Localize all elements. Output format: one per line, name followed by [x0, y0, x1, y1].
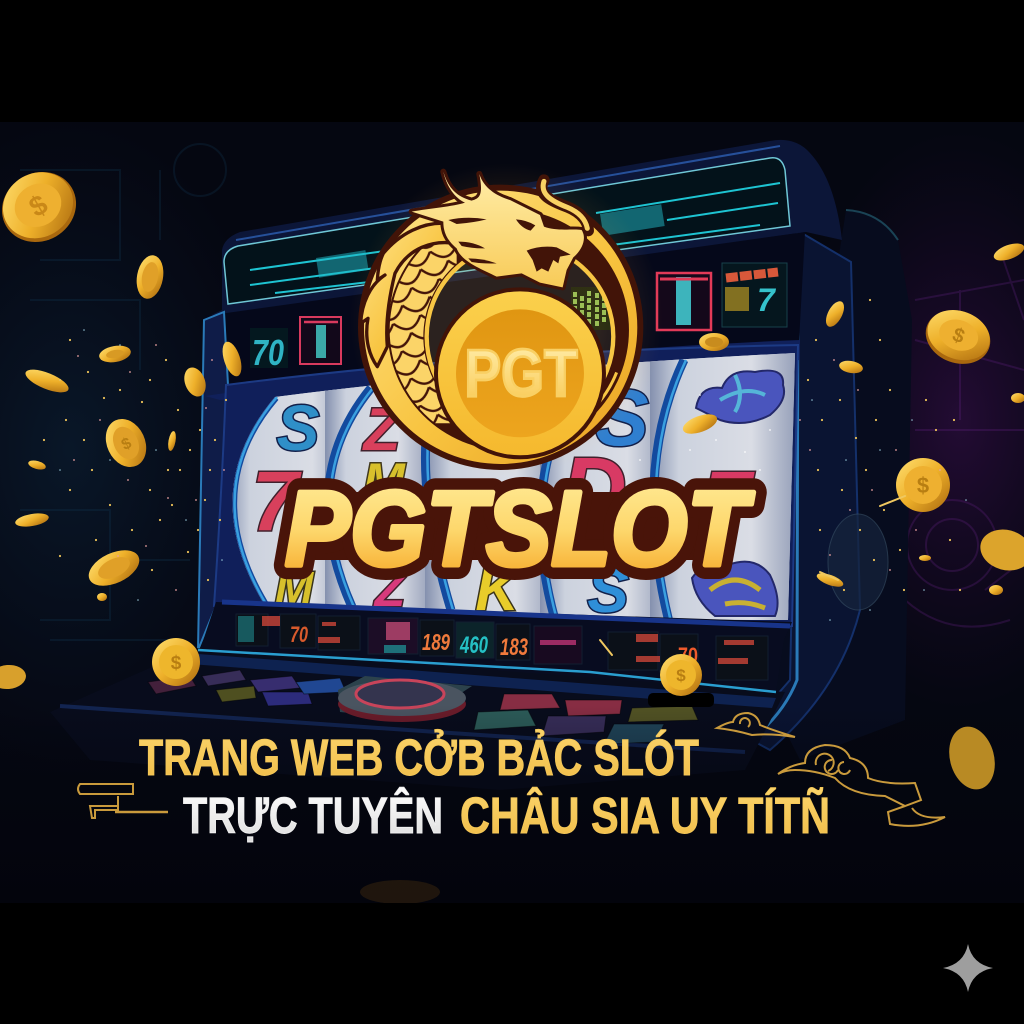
panel with number 7: 7 [757, 282, 777, 318]
tagline line 1: TRANG WEB CỞB BẢC SLÓT [139, 728, 699, 786]
number 70 orange: 70 [290, 622, 309, 647]
dragon ring body [358, 185, 643, 470]
PGT coin: PGT [464, 337, 578, 411]
slot machine cabinet [198, 140, 912, 760]
purple swirl top [696, 371, 784, 423]
flying gold coins: $ [917, 473, 929, 498]
icon: small cloud [717, 713, 795, 737]
neon tile left [300, 317, 341, 364]
flying gold coins: $ [949, 324, 967, 348]
rear side box [770, 210, 912, 760]
lower display row body [205, 232, 805, 400]
reel symbols: 7 [705, 454, 755, 548]
coin slot [648, 693, 714, 707]
panel tiles [236, 614, 768, 680]
LED status panel row [200, 602, 792, 692]
number 189: 189 [422, 629, 450, 655]
dragon head [412, 172, 584, 287]
number 183: 183 [500, 634, 528, 661]
blue band above reels [205, 340, 800, 400]
reel dividers [233, 360, 684, 622]
icon: scroll left [78, 784, 168, 818]
control console [50, 648, 785, 790]
reel symbols: M [363, 453, 406, 509]
topper display [224, 158, 790, 304]
reel symbols: Z [362, 396, 403, 463]
flying gold coins [0, 159, 1024, 904]
PGT coin [434, 287, 606, 459]
wordmark backing [292, 492, 736, 560]
reel symbols: K [475, 556, 522, 623]
tagline line 2 gold: CHÂU SIA UY TÍTÑ [460, 786, 830, 844]
reel symbols: 7 [252, 454, 302, 548]
reel symbols: S [277, 392, 320, 464]
fade to dark below machine [0, 705, 1024, 903]
flying gold coins: $ [676, 666, 686, 685]
panel with number 7 [722, 263, 787, 327]
sparkle particles [44, 300, 966, 655]
reel symbols: S [595, 373, 649, 462]
console buttons [148, 670, 698, 744]
dragon face details [448, 218, 571, 272]
purple swirl bottom [692, 562, 778, 616]
side panel [742, 232, 860, 750]
tile 70: 70 [252, 332, 284, 373]
flying gold coins: $ [171, 653, 182, 674]
number 70 right: 70 [678, 643, 698, 668]
dragon horn [542, 180, 588, 231]
red text bars [262, 616, 754, 664]
wordmark outline: PGTSLOT [285, 470, 755, 588]
reel symbols: D [562, 440, 626, 540]
icon: cloud scroll right [778, 745, 945, 826]
green tile [571, 287, 610, 330]
reels [220, 345, 800, 630]
dragon mane [361, 223, 455, 367]
topper [205, 140, 842, 318]
central spin button [338, 676, 472, 722]
tagline line 2 white: TRỰC TUYÊN [183, 786, 443, 844]
wordmark letters: PGTSLOT [285, 470, 755, 588]
PGTSLOT wordmark [285, 470, 755, 588]
dragon coin logo [358, 168, 650, 470]
flying gold coins: $ [24, 188, 53, 223]
top black band [0, 0, 1024, 122]
number 460: 460 [459, 632, 488, 659]
reel frame [214, 345, 798, 626]
icon: sparkle star [943, 944, 993, 992]
flying gold coins: $ [119, 435, 134, 454]
tagline [139, 728, 830, 844]
neon tile right [657, 273, 711, 330]
reel symbols [256, 388, 756, 614]
reel symbols: S [587, 557, 629, 626]
bottom black band [0, 903, 1024, 1024]
left frame [198, 312, 228, 650]
reel symbols: M [275, 562, 315, 614]
reel symbols: Z [373, 561, 408, 617]
